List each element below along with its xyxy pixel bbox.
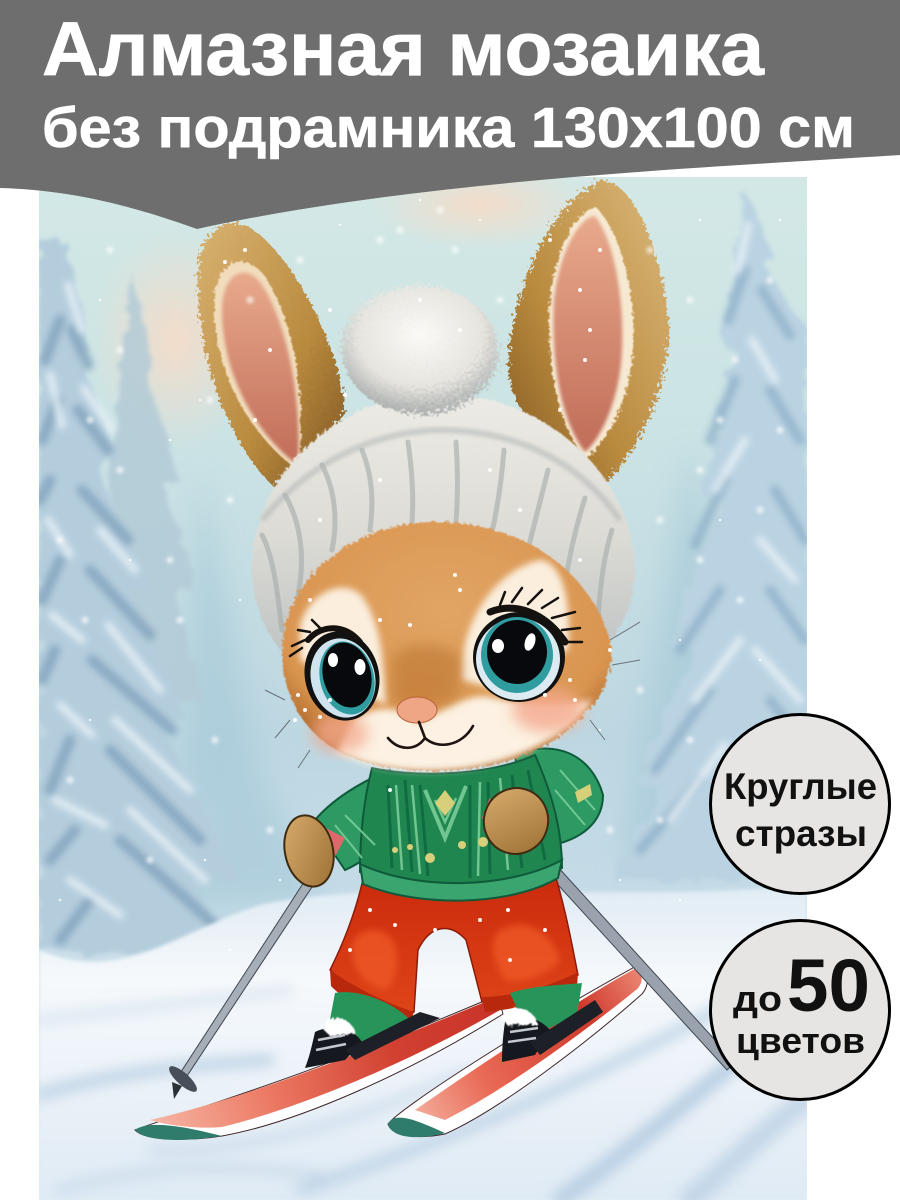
snow ground [39, 888, 807, 1131]
sweater left sleeve [316, 768, 391, 872]
right ski [388, 964, 648, 1137]
peach glow top [398, 180, 563, 240]
sweater pattern [392, 784, 592, 863]
right tree snow boughs [670, 225, 800, 820]
badge: up to 50 colours [710, 920, 890, 1100]
illustration: bunny skiing in a snowy forest [39, 160, 807, 1200]
snow ground shadows [39, 960, 807, 1200]
right cheek blush [512, 688, 584, 732]
badge: up to 50 colours: цветов [736, 1020, 865, 1061]
badge: round rhinestones: стразы [735, 813, 867, 854]
right ear [508, 180, 669, 489]
knitted hat [252, 393, 635, 655]
right boot [502, 983, 603, 1062]
left tree snow boughs [48, 285, 205, 915]
sweater body [360, 755, 562, 893]
left ski pole [166, 882, 312, 1099]
right mitten [482, 787, 550, 855]
badge: up to 50 colours: до [733, 978, 782, 1019]
title: Алмазная мозаика [42, 7, 765, 92]
left eye [290, 620, 389, 729]
cream left brow patch [300, 588, 386, 705]
cream muzzle [335, 696, 592, 771]
whiskers [265, 622, 640, 768]
subtitle: без подрамника 130х100 см [42, 96, 855, 160]
sweater cable knit [388, 770, 545, 878]
sweater hem [360, 860, 562, 901]
left mitten [283, 814, 345, 888]
right ski pole [557, 870, 730, 1071]
big tree right [610, 190, 807, 880]
bunny face [265, 522, 640, 771]
winter sky background [39, 177, 807, 1200]
falling snowflakes [60, 200, 780, 960]
left boot [305, 992, 440, 1068]
smile [388, 722, 473, 748]
sweater [315, 748, 603, 901]
centre fur stripe [392, 645, 462, 708]
right tree dark boughs [640, 270, 805, 850]
peach glow left [108, 256, 221, 428]
sweater right sleeve [515, 748, 603, 846]
nose [397, 697, 437, 723]
red trousers [329, 880, 579, 1018]
left tree dark boughs [40, 320, 215, 940]
badge: round rhinestones: Круглые [724, 766, 877, 807]
badge: up to 50 colours: 50 [787, 944, 870, 1027]
left cheek blush [312, 713, 368, 753]
left ski [135, 995, 503, 1140]
cream right brow patch [462, 560, 569, 690]
back tree left [108, 278, 192, 697]
grey header banner [0, 0, 900, 229]
left ear [198, 223, 344, 487]
hat pompom [342, 286, 498, 414]
badge: round rhinestones [710, 714, 890, 894]
right eye [473, 588, 582, 702]
hat fold [262, 430, 620, 520]
big tree left [39, 240, 240, 960]
distant tree haze [184, 475, 706, 912]
